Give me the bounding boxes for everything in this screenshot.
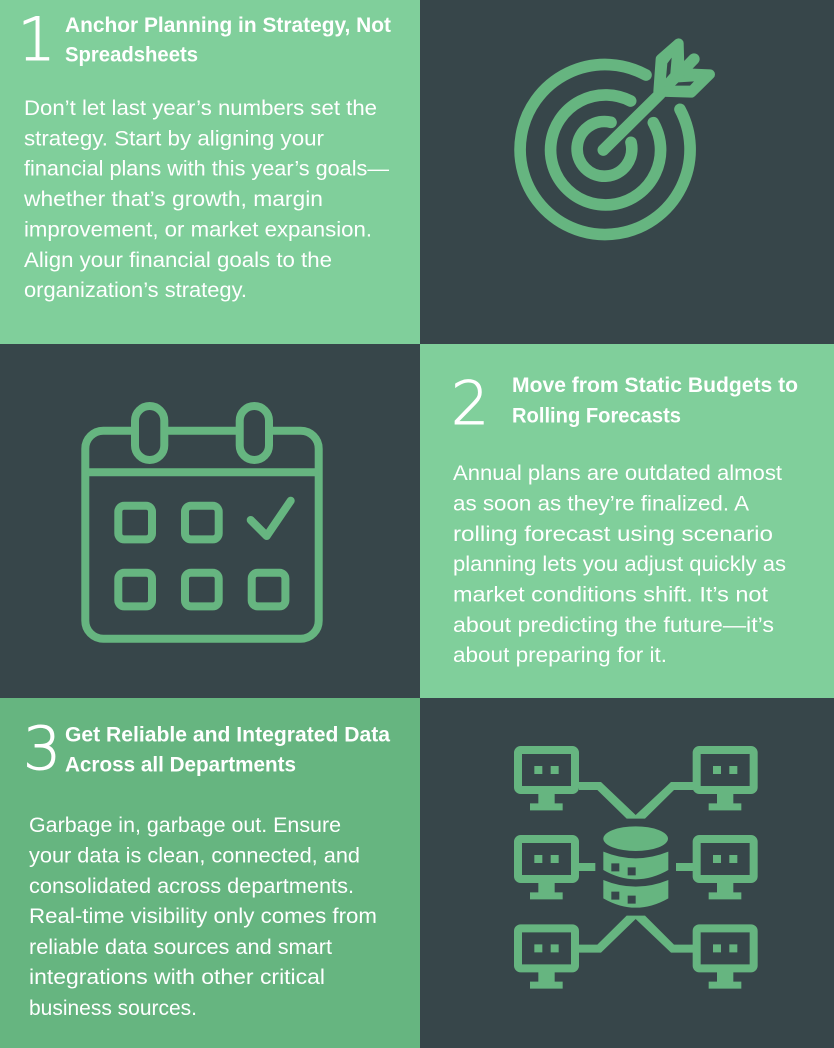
body text: step 1: financial plans with this year’s goals— — [24, 157, 390, 181]
body text: step 3: Real-time visibility only comes from — [29, 904, 377, 928]
heading: step 1 — [65, 14, 391, 66]
panel: step 1 text — [0, 0, 420, 344]
panel: target icon — [420, 0, 834, 344]
panel: step 3 text — [0, 698, 420, 1048]
body text: step 1: strategy. Start by aligning your — [24, 126, 324, 150]
panel: step 2 text — [420, 344, 834, 698]
heading: step 2: Move from Static Budgets to — [512, 374, 798, 397]
heading: step 2: Rolling Forecasts — [512, 405, 681, 428]
body text: step 3: Garbage in, garbage out. Ensure — [29, 813, 341, 837]
body text: step 2: about predicting the future—it’s — [453, 613, 774, 637]
body text: step 2: as soon as they’re finalized. A — [453, 492, 750, 516]
body text: step 3 — [29, 813, 377, 1020]
body text: step 3: reliable data sources and smart — [29, 935, 332, 959]
body text: step 1 — [23, 96, 390, 302]
body text: step 1: Don’t let last year’s numbers set the — [24, 96, 377, 120]
number 2: 2 — [451, 369, 489, 439]
body text: step 1: organization’s strategy. — [24, 278, 247, 302]
body text: step 2: planning lets you adjust quickly as — [453, 552, 786, 576]
body text: step 1: whether that’s growth, margin — [23, 187, 323, 211]
body text: step 3: consolidated across departments. — [29, 874, 354, 898]
body text: step 2 — [453, 461, 786, 667]
body text: step 2: market conditions shift. It’s not — [453, 582, 768, 606]
heading: step 3: Get Reliable and Integrated Data — [65, 724, 390, 747]
heading: step 3 — [65, 724, 390, 777]
number 3: 3 — [23, 714, 61, 784]
body text: step 1: improvement, or market expansion. — [24, 218, 372, 242]
heading: step 3: Across all Departments — [65, 754, 296, 777]
number 1: 1 — [18, 5, 56, 75]
icon: target with arrow — [520, 43, 710, 235]
body text: step 1: Align your financial goals to the — [24, 248, 332, 272]
body text: step 3: integrations with other critical — [29, 965, 325, 989]
heading: step 1: Spreadsheets — [65, 44, 198, 66]
body text: step 2: rolling forecast using scenario — [453, 522, 773, 546]
heading: step 1: Anchor Planning in Strategy, Not — [65, 14, 391, 37]
body text: step 2: about preparing for it. — [453, 643, 667, 667]
panel: calendar icon — [0, 344, 420, 698]
icon: calendar — [85, 406, 319, 639]
body text: step 3: business sources. — [29, 996, 197, 1020]
body text: step 2: Annual plans are outdated almost — [453, 461, 782, 485]
icon: database connected to six monitors — [514, 746, 758, 989]
panel: network icon — [420, 698, 834, 1048]
heading: step 2 — [512, 374, 798, 428]
body text: step 3: your data is clean, connected, and — [29, 844, 360, 868]
